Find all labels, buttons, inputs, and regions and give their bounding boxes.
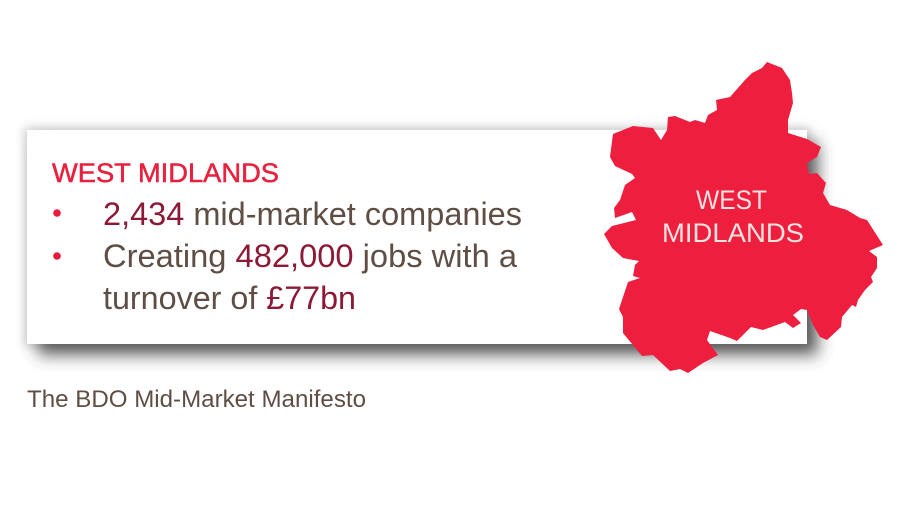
map: West Midlands region <box>604 62 883 373</box>
panel: info card with shadow <box>24 127 818 355</box>
text: turnover: turnover of £77bn <box>103 280 356 316</box>
map label: West: WEST <box>696 185 767 215</box>
icon: bullet 2 <box>53 252 61 260</box>
caption: The BDO Mid-Market Manifesto <box>27 386 366 413</box>
text: companies: 2,434 mid-market companies <box>103 196 522 232</box>
heading: West Midlands: WEST MIDLANDS <box>52 158 279 188</box>
map label: Midlands: MIDLANDS <box>662 218 804 248</box>
text: jobs: Creating 482,000 jobs with a <box>103 238 517 274</box>
icon: bullet 1 <box>53 209 61 217</box>
